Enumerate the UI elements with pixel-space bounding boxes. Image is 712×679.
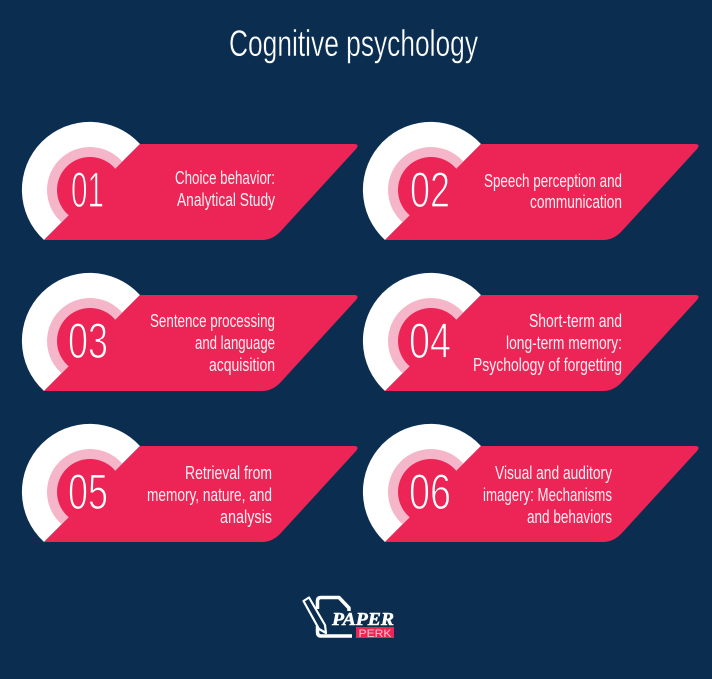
title: Cognitive psychology — [229, 23, 478, 64]
number 04: 04 — [409, 313, 451, 369]
text: card 06 — [483, 463, 612, 527]
panel: card 05 — [22, 424, 358, 542]
text: card 04: long-term memory: — [506, 333, 622, 353]
number 03: 03 — [68, 313, 108, 369]
text: card 01 — [175, 168, 275, 210]
panel: card 03 — [22, 273, 358, 391]
text: card 03 — [150, 311, 275, 375]
text: card 06: Visual and auditory — [495, 463, 612, 483]
panel: card 04 — [363, 273, 699, 391]
text: card 04: Psychology of forgetting — [473, 355, 622, 375]
icon: pencil — [304, 598, 326, 633]
text: card 05 — [147, 463, 272, 527]
badge: PERK: PERK — [358, 628, 392, 640]
wordmark: PAPER: PAPER — [331, 609, 394, 629]
text: card 04: Short-term and — [529, 311, 622, 331]
text: card 06: imagery: Mechanisms — [483, 485, 612, 505]
text: card 01: Choice behavior: — [175, 168, 275, 188]
panel: card 02 — [363, 122, 699, 240]
text: card 04 — [473, 311, 622, 375]
text: card 02 — [484, 171, 622, 212]
panel: card 06 — [363, 424, 699, 542]
text: card 05: analysis — [220, 507, 272, 527]
number 01: 01 — [71, 162, 104, 218]
text: card 03: acquisition — [209, 355, 275, 375]
text: card 05: memory, nature, and — [147, 485, 272, 505]
number 06: 06 — [409, 464, 451, 520]
number 05: 05 — [68, 464, 108, 520]
text: card 01: Analytical Study — [177, 190, 275, 210]
text: card 03: Sentence processing — [150, 311, 275, 331]
panel: card 01 — [22, 122, 358, 240]
logo: Paper Perk — [304, 598, 394, 640]
text: card 05: Retrieval from — [185, 463, 272, 483]
icon: document — [318, 598, 352, 636]
text: card 06: and behaviors — [527, 507, 612, 527]
text: card 02: communication — [530, 192, 622, 212]
text: card 02: Speech perception and — [484, 171, 622, 191]
text: card 03: and language — [195, 333, 275, 353]
number 02: 02 — [410, 162, 450, 218]
